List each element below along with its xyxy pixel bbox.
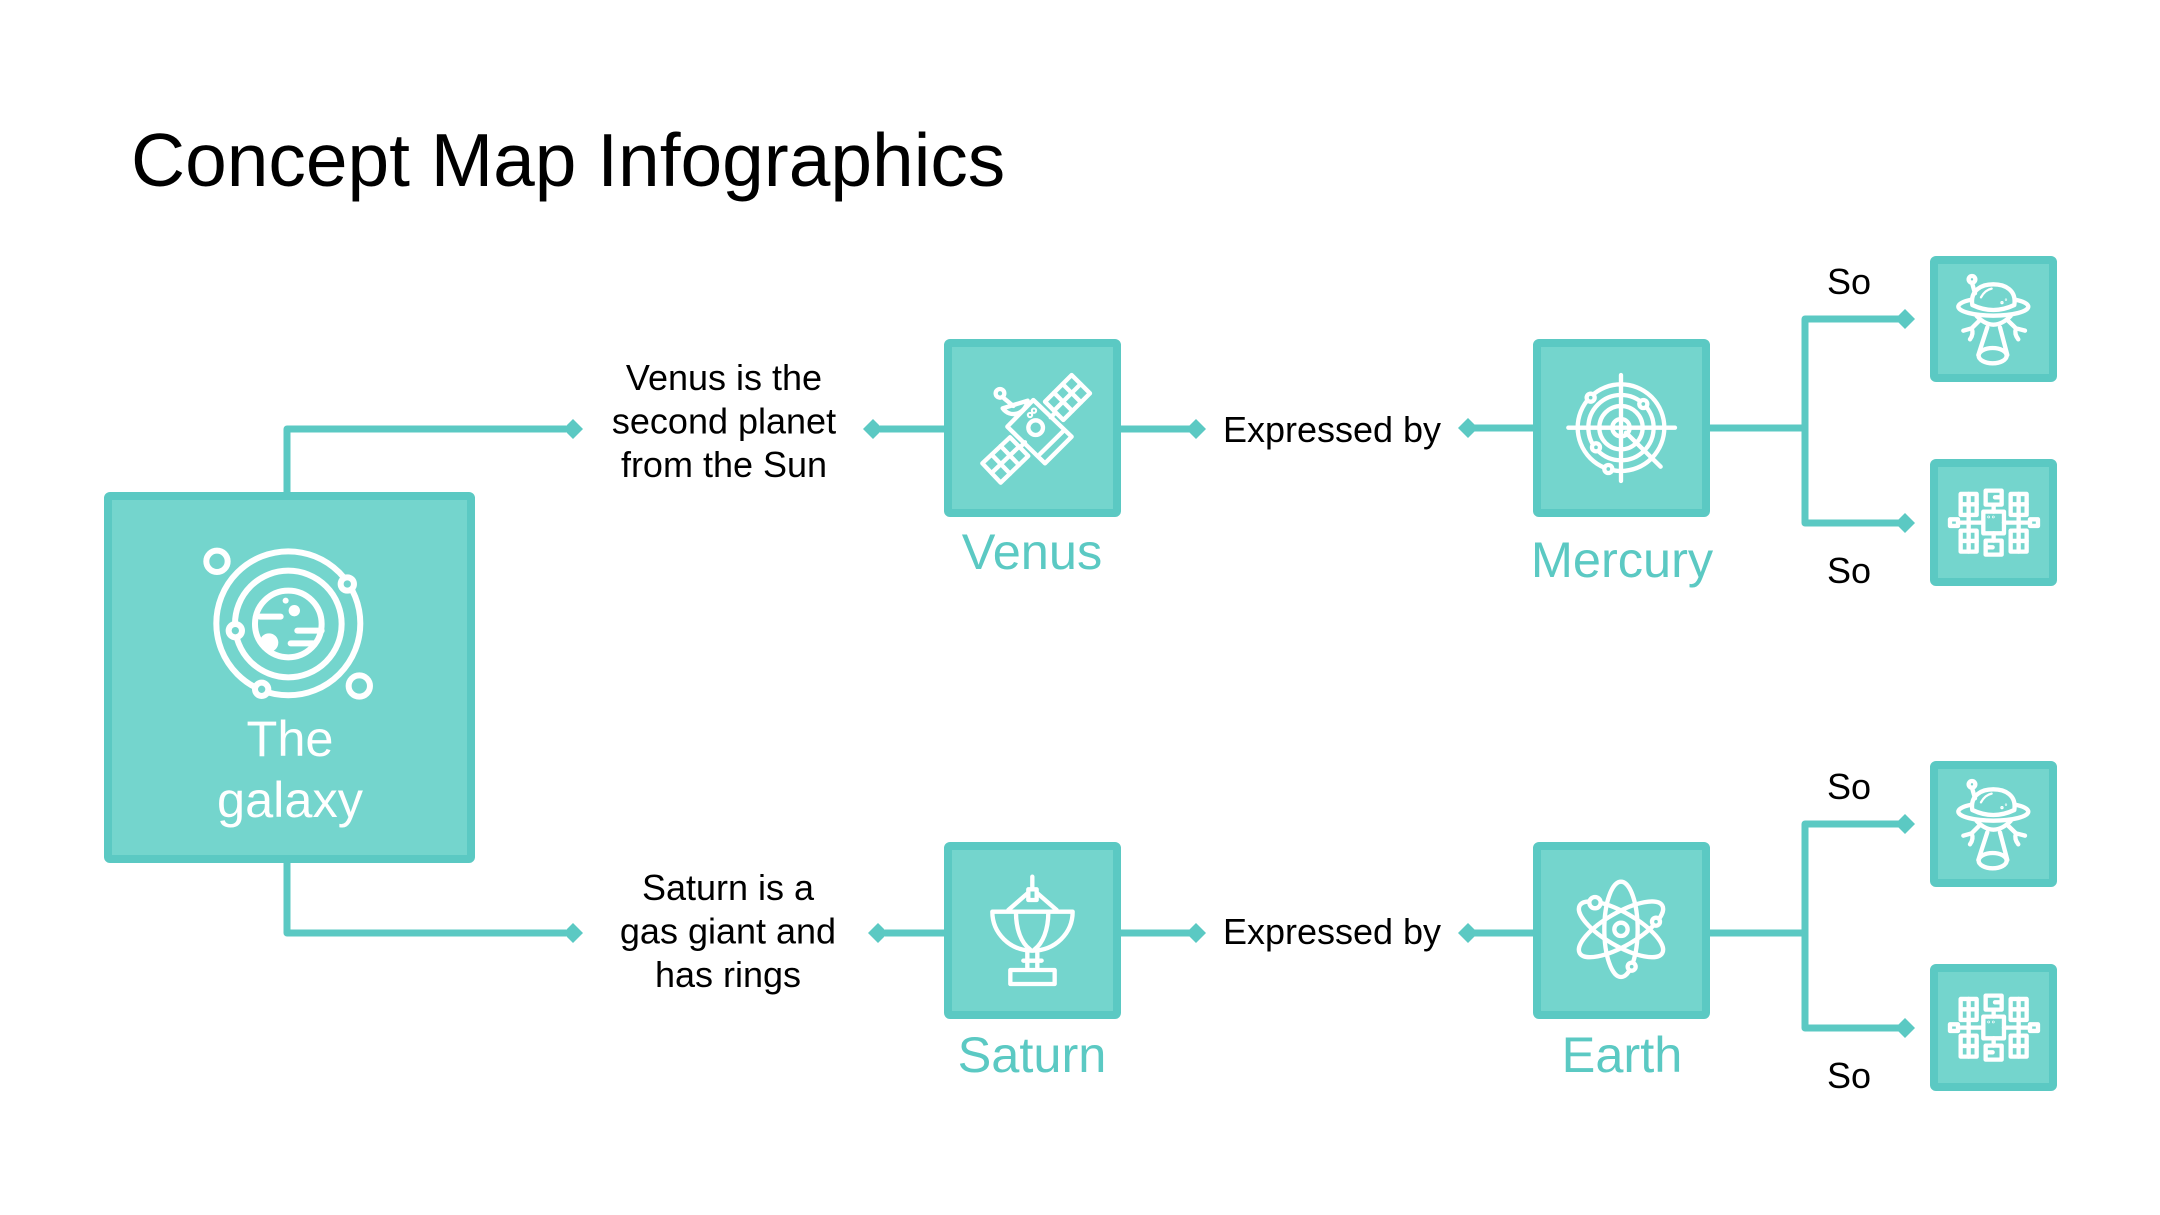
connector: Venus left bbox=[863, 419, 944, 439]
text: Venus description: Venus is the bbox=[626, 357, 822, 398]
icon: UFO bbox=[1958, 276, 2028, 363]
panel: Venus bbox=[948, 343, 1117, 513]
connector: galaxy to Venus description bbox=[287, 419, 583, 492]
text: Saturn description bbox=[620, 867, 836, 995]
icon: radar bbox=[1568, 375, 1675, 481]
text: Expressed by (bottom): Expressed by bbox=[1223, 911, 1441, 952]
connector: Earth left bbox=[1458, 923, 1533, 943]
title: Concept Map Infographics bbox=[131, 118, 1005, 202]
label: Saturn: Saturn bbox=[958, 1026, 1106, 1083]
icon: satellite bbox=[982, 375, 1090, 483]
icon: radio dish bbox=[992, 877, 1073, 984]
panel: the galaxy bbox=[108, 496, 471, 859]
label: The galaxy: galaxy bbox=[217, 771, 364, 828]
branch connector: Mercury bbox=[1710, 309, 1915, 533]
panel: Saturn bbox=[948, 846, 1117, 1015]
connector: Mercury left bbox=[1458, 418, 1533, 438]
connector: galaxy to Saturn description bbox=[287, 863, 583, 943]
connector: Saturn to Expressed by bbox=[1121, 923, 1206, 943]
icon: space station bbox=[1950, 996, 2038, 1060]
connector: Venus to Expressed by bbox=[1121, 419, 1206, 439]
label: The galaxy: The bbox=[246, 710, 334, 767]
label: Venus: Venus bbox=[962, 523, 1102, 580]
icon: atom bbox=[1571, 882, 1671, 977]
icon: space station bbox=[1950, 491, 2038, 555]
text: Venus description bbox=[612, 357, 836, 485]
text: Saturn description: Saturn is a bbox=[642, 867, 815, 908]
label: The galaxy bbox=[217, 710, 364, 828]
panel: Mercury bbox=[1537, 343, 1706, 513]
panel: UFO bottom bbox=[1934, 765, 2053, 883]
text: So (Mercury lower): So bbox=[1827, 550, 1871, 591]
text: Saturn description: gas giant and bbox=[620, 910, 836, 952]
panel: space station top bbox=[1934, 463, 2053, 582]
icon: UFO bbox=[1958, 781, 2028, 868]
text: Venus description: second planet bbox=[612, 400, 836, 442]
connector: Saturn left bbox=[868, 923, 944, 943]
label: Earth: Earth bbox=[1562, 1026, 1682, 1083]
text: Venus description: from the Sun bbox=[621, 444, 827, 485]
text: So (Mercury upper): So bbox=[1827, 261, 1871, 302]
label: Mercury: Mercury bbox=[1531, 531, 1714, 588]
branch connector: Earth bbox=[1710, 814, 1915, 1038]
text: Expressed by (top): Expressed by bbox=[1223, 409, 1441, 450]
text: So (Earth upper): So bbox=[1827, 766, 1871, 807]
panel: space station bottom bbox=[1934, 968, 2053, 1087]
text: Saturn description: has rings bbox=[655, 954, 801, 995]
panel: UFO top bbox=[1934, 260, 2053, 378]
icon: planetary system bbox=[206, 551, 370, 697]
panel: Earth bbox=[1537, 846, 1706, 1015]
text: So (Earth lower): So bbox=[1827, 1055, 1871, 1096]
